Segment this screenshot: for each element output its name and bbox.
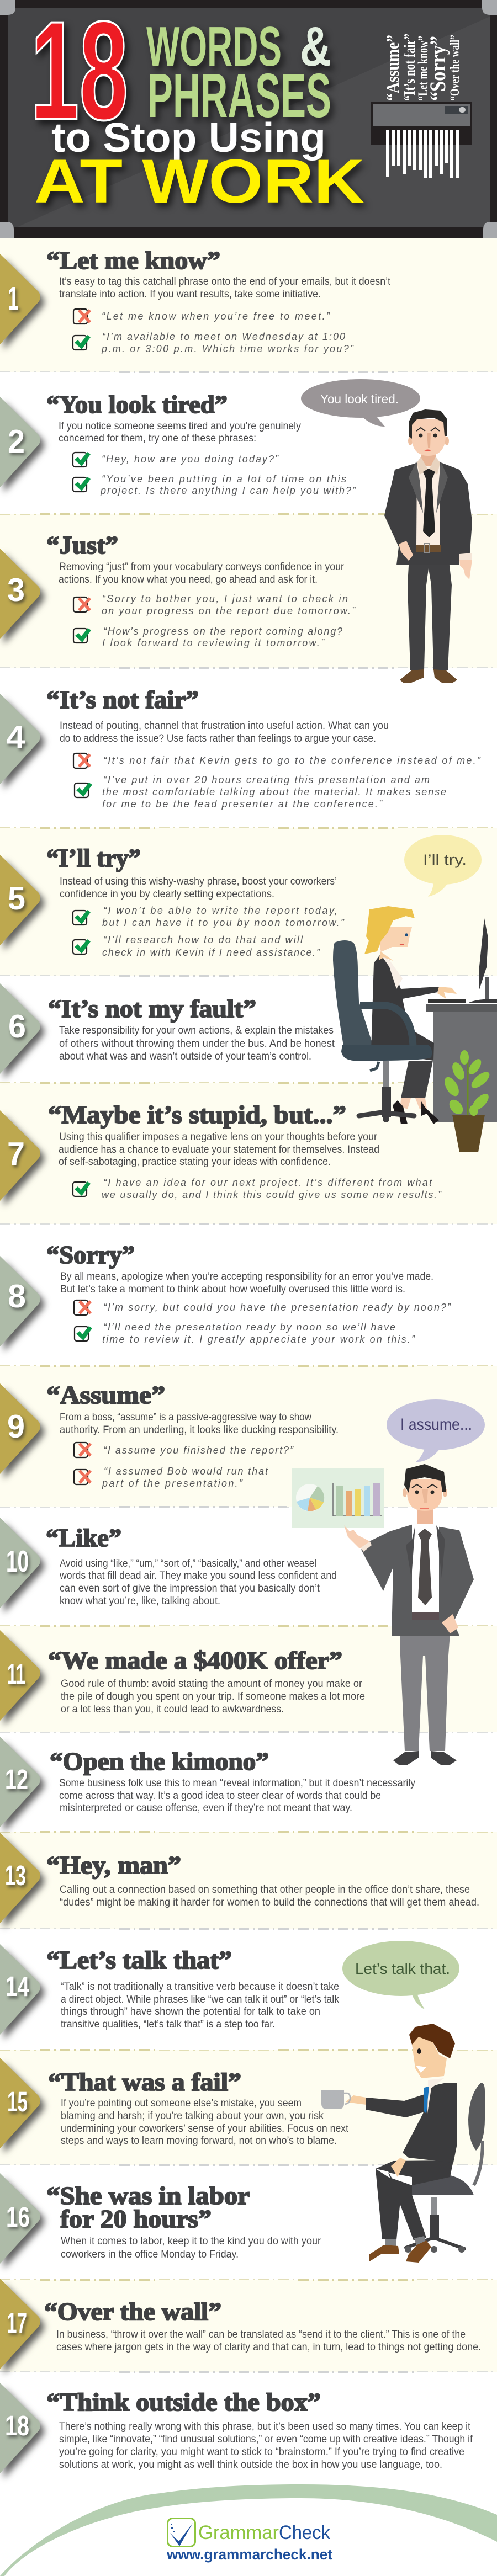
heading 14: “Let’s talk that” xyxy=(46,1946,232,1974)
body 9: From a boss, “assume” is a passive-aggressive way to show xyxy=(60,1411,312,1423)
body 12 xyxy=(59,1777,415,1814)
body 5 xyxy=(60,875,337,900)
badge 6: 6 xyxy=(8,1008,26,1045)
panel: phrase 7 xyxy=(0,1100,442,1201)
body 13: Calling out a connection based on something that other people in the office don’t share, these xyxy=(60,1883,470,1896)
body 18: solutions at work, you might as well think outside the box in how you use language, too. xyxy=(59,2458,442,2471)
body 4: Instead of pouting, channel that frustration into useful action. What can you xyxy=(60,720,389,732)
heading 18: “Think outside the box” xyxy=(46,2388,321,2416)
icon: coffee cup xyxy=(321,2090,350,2109)
panel: phrase 16 xyxy=(0,2173,321,2264)
body 7: audience has a chance to evaluate your statement for themselves. Instead xyxy=(59,1143,379,1156)
good example 4 xyxy=(75,774,446,810)
chart board xyxy=(292,1468,384,1528)
logo wordmark: Check xyxy=(279,2522,330,2543)
body 8: By all means, apologize when you’re accepting responsibility for an error you’ve made. xyxy=(60,1270,433,1282)
body 5: confidence in you by clearly setting expectations. xyxy=(60,888,274,900)
good example 5b: “I’ll research how to do that and will xyxy=(103,934,303,945)
logo wordmark: Grammar xyxy=(198,2522,279,2543)
good example 3: I look forward to reviewing it tomorrow.” xyxy=(102,637,325,648)
good example 4: the most comfortable talking about the material. It makes sense xyxy=(102,786,446,797)
body 3: actions. If you know what you need, go ahead and ask for it. xyxy=(59,573,318,586)
badge 14 xyxy=(0,1944,40,2035)
speech bubble: i assume: I assume... xyxy=(400,1415,472,1434)
speech bubble: you look tired xyxy=(301,379,420,427)
good example 1: p.m. or 3:00 p.m. Which time works for you?” xyxy=(101,343,354,354)
good example 1 xyxy=(73,331,354,354)
icon: shredder: “Let me know” xyxy=(416,36,431,101)
badge 10: 10 xyxy=(6,1544,29,1578)
bad example 1: “Let me know when you’re free to meet.” xyxy=(102,311,330,322)
badge 2: 2 xyxy=(8,423,25,460)
body 14: transitive qualities, “let’s talk that” is a step too far. xyxy=(61,2018,275,2030)
heading 3: “Just” xyxy=(46,531,118,559)
title: words: WORDS xyxy=(146,16,282,78)
body 17: In business, “throw it over the wall” can be translated as “send it to the client.” This is one of the xyxy=(56,2328,466,2340)
body 11 xyxy=(61,1678,365,1715)
badge 15: 15 xyxy=(7,2086,28,2117)
badge 17 xyxy=(0,2279,40,2369)
badge 1 xyxy=(0,254,40,344)
title: phrases: PHRASES xyxy=(147,61,331,130)
heading 4: “It’s not fair” xyxy=(46,685,199,714)
body 11: Good rule of thumb: avoid stating the amount of money you make or xyxy=(61,1678,362,1690)
heading 10: “Like” xyxy=(46,1524,121,1552)
good example 5a: but I can have it to you by noon tomorrow.” xyxy=(102,917,345,928)
body 7 xyxy=(59,1131,379,1168)
badge 7 xyxy=(0,1110,40,1201)
badge 18 xyxy=(0,2383,40,2473)
good example 8: “I’ll need the presentation ready by noon so we’ll have xyxy=(103,1322,395,1333)
heading 15: “That was a fail” xyxy=(48,2068,241,2096)
badge 14: 14 xyxy=(6,1971,29,2002)
body 6 xyxy=(59,1024,335,1062)
badge 9: 9 xyxy=(7,1408,25,1445)
body 14: a direct object. While phrases like “we can talk it out” or “let’s talk xyxy=(61,1993,339,2005)
body 8: But let’s take a moment to think about how woefully overused this little word is. xyxy=(60,1283,405,1295)
badge 4 xyxy=(0,694,40,784)
body 15: undermining your coworkers’ sense of your abilities. Focus on next xyxy=(61,2122,349,2135)
body 6: about what was and wasn’t outside of your team’s control. xyxy=(59,1050,311,1062)
bad example 1 xyxy=(73,309,330,324)
badge 12 xyxy=(0,1737,40,1827)
body 15: If you’re pointing out someone else’s mistake, you seem xyxy=(61,2097,302,2109)
body 15: blaming and harsh; if you’re talking about your own, you risk xyxy=(61,2110,324,2122)
badge 15 xyxy=(0,2058,40,2148)
heading 12: “Open the kimono” xyxy=(50,1747,269,1775)
good example 8 xyxy=(75,1322,415,1345)
bad example 9b xyxy=(74,1466,268,1489)
good example 2a: “Hey, how are you doing today?” xyxy=(102,454,279,465)
badge 11: 11 xyxy=(7,1658,25,1690)
good example 8: time to review it. I greatly appreciate your work on this.” xyxy=(102,1334,415,1345)
heading 16 xyxy=(46,2181,250,2233)
badge 2 xyxy=(0,397,40,487)
badge 4: 4 xyxy=(6,719,25,755)
badge 5: 5 xyxy=(8,880,25,917)
body 16: coworkers in the office Monday to Friday. xyxy=(61,2248,239,2260)
badge 8: 8 xyxy=(8,1278,26,1314)
good example 2b: project. Is there anything I can help you with?” xyxy=(100,485,356,496)
body 11: or a lot less than you, it could lead to awkwardness. xyxy=(61,1703,284,1715)
body 2 xyxy=(59,420,301,444)
body 3 xyxy=(59,561,344,586)
body 18 xyxy=(59,2420,473,2471)
body 1 xyxy=(59,275,391,300)
body 17 xyxy=(56,2328,481,2353)
bad example 4 xyxy=(73,753,481,768)
body 6: of others without throwing them under the bus. And be honest xyxy=(59,1037,335,1050)
body 10 xyxy=(59,1557,337,1607)
panel: phrase 6 xyxy=(0,983,335,1074)
illustration: man with speech bubble xyxy=(301,379,472,683)
icon: logo check xyxy=(168,2519,195,2546)
badge 9 xyxy=(0,1383,40,1474)
body 12: Some business folk use this to mean “reveal information,” but it doesn’t necessarily xyxy=(59,1777,415,1789)
body 6: Take responsibility for your own actions, & explain the mistakes xyxy=(59,1024,334,1036)
body 13: “dudes” might be making it harder for women to build the connections that will get them ahead. xyxy=(60,1896,479,1908)
body 14: things through” have shown the potential for talk to take on xyxy=(61,2005,320,2018)
title: at work: AT WORK xyxy=(34,147,364,216)
heading 6: “It’s not my fault” xyxy=(48,994,256,1023)
good example 2b xyxy=(73,473,356,496)
panel: phrase 9 xyxy=(0,1381,339,1489)
bad example 8 xyxy=(74,1300,451,1315)
good example 2a xyxy=(73,452,279,467)
body 7: of self-sabotaging, practice stating your ideas with confidence. xyxy=(59,1156,331,1168)
badge 12: 12 xyxy=(5,1764,28,1795)
body 2: concerned for them, try one of these phrases: xyxy=(59,432,256,444)
body 15 xyxy=(61,2097,349,2147)
badge 6 xyxy=(0,983,40,1074)
body 10: know what you’re, like, talking about. xyxy=(60,1595,220,1607)
icon: shredder: “Sorry” xyxy=(425,36,450,101)
body 10: Avoid using “like,” “um,” “sort of,” “basically,” and other weasel xyxy=(60,1557,316,1569)
badge 16: 16 xyxy=(6,2201,30,2233)
badge 18: 18 xyxy=(5,2410,29,2441)
body 16 xyxy=(61,2235,321,2260)
icon: plant xyxy=(442,1050,492,1152)
body 13 xyxy=(60,1883,479,1908)
body 8 xyxy=(60,1270,433,1295)
panel: phrase 4 xyxy=(0,685,481,810)
body 7: Using this qualifier imposes a negative lens on your thoughts before your xyxy=(59,1131,377,1143)
body 14 xyxy=(61,1981,339,2030)
speech bubble: i assume xyxy=(387,1399,485,1462)
badge 3 xyxy=(0,549,40,639)
panel: phrase 8 xyxy=(0,1241,451,1346)
body 16: When it comes to labor, keep it to the kind you do with your xyxy=(61,2235,321,2247)
body 5: Instead of using this wishy-washy phrase, boost your coworkers’ xyxy=(60,875,337,887)
panel: phrase 18 xyxy=(0,2383,473,2473)
speech bubble: let's talk that xyxy=(342,1941,459,2009)
panel: phrase 2 xyxy=(0,390,356,496)
body 12: come across that way. It’s a good idea to steer clear of words that could be xyxy=(59,1790,381,1802)
badge 13 xyxy=(0,1833,40,1923)
good example 5b: check in with Kevin if I need assistance.” xyxy=(102,947,320,958)
badge 17: 17 xyxy=(7,2307,27,2339)
panel: phrase 1 xyxy=(0,246,391,354)
badge 10 xyxy=(0,1518,40,1608)
good example 7: “I have an idea for our next project. It’s different from what xyxy=(103,1177,432,1188)
illustration: woman at desk xyxy=(333,835,497,1152)
illustration: man with chart xyxy=(292,1399,485,1765)
logo url: www.grammarcheck.net xyxy=(166,2546,332,2563)
bad example 3: “Sorry to bother you, I just want to check in xyxy=(102,593,348,604)
bad example 3 xyxy=(73,593,356,616)
bad example 9b: part of the presentation.” xyxy=(102,1478,243,1489)
badge 16 xyxy=(0,2173,40,2264)
good example 2b: “You’ve been putting in a lot of time on this xyxy=(102,473,346,485)
speech bubble: i'll try: I’ll try. xyxy=(423,851,467,868)
body 12: misinterpreted or cause offense, even if they’re not meant that way. xyxy=(60,1802,352,1814)
panel: phrase 13 xyxy=(0,1833,479,1923)
bad example 3: on your progress on the report due tomorrow.” xyxy=(102,605,356,616)
heading 16: for 20 hours” xyxy=(60,2205,212,2233)
title: to stop using: to Stop Using xyxy=(51,114,326,161)
body 9 xyxy=(60,1411,339,1436)
speech bubble: you look tired: You look tired. xyxy=(320,392,399,406)
body 10: words that fill dead air. They make you sound less confident and xyxy=(59,1569,337,1582)
body 2: If you notice someone seems tired and you’re genuinely xyxy=(59,420,301,432)
good example 4: “I’ve put in over 20 hours creating this presentation and am xyxy=(103,774,430,785)
heading 16: “She was in labor xyxy=(46,2181,250,2210)
heading 8: “Sorry” xyxy=(46,1241,135,1269)
good example 5b xyxy=(73,934,320,958)
panel: phrase 17 xyxy=(0,2279,481,2369)
body 18: you’re going for clarity, you might want to stick to “brainstorm.” If you’re trying to find creative xyxy=(59,2446,464,2458)
panel: phrase 5 xyxy=(0,844,345,958)
icon: shredder: “Over the wall” xyxy=(448,35,462,101)
bad example 8: “I’m sorry, but could you have the presentation ready by noon?” xyxy=(103,1302,451,1313)
heading 1: “Let me know” xyxy=(46,246,220,274)
badge 3: 3 xyxy=(7,572,25,608)
panel: phrase 3 xyxy=(0,531,356,648)
badge 11 xyxy=(0,1630,40,1721)
heading 5: “I’ll try” xyxy=(46,844,141,872)
good example 1: “I’m available to meet on Wednesday at 1:00 xyxy=(102,331,345,342)
body 10: can even sort of give the impression that you basically don’t xyxy=(60,1582,320,1594)
bad example 9b: “I assumed Bob would run that xyxy=(104,1466,268,1477)
body 3: Removing “just” from your vocabulary conveys confidence in your xyxy=(59,561,344,573)
logo wordmark xyxy=(198,2522,330,2543)
speech bubble: let's talk that: Let’s talk that. xyxy=(355,1960,450,1977)
icon: shredder xyxy=(371,34,472,178)
panel: phrase 15 xyxy=(0,2058,349,2148)
good example 7: we usually do, and I think this could give us some new results.” xyxy=(102,1189,442,1200)
illustration: man with coffee xyxy=(321,1941,485,2263)
heading 2: “You look tired” xyxy=(46,390,228,418)
panel: phrase 11 xyxy=(0,1630,365,1721)
badge 13: 13 xyxy=(5,1860,26,1891)
icon: shredder: “It’s not fair” xyxy=(401,34,419,101)
body 14: “Talk” is not traditionally a transitive verb because it doesn’t take xyxy=(61,1981,339,1993)
heading 17: “Over the wall” xyxy=(44,2297,221,2325)
good example 5a xyxy=(73,905,345,928)
panel: phrase 14 xyxy=(0,1944,339,2035)
badge 1: 1 xyxy=(8,280,19,317)
badge 5 xyxy=(0,855,40,945)
panel: phrase 12 xyxy=(0,1737,415,1827)
badge 7: 7 xyxy=(7,1136,25,1172)
bad example 4: “It’s not fair that Kevin gets to go to the conference instead of me.” xyxy=(103,755,481,766)
logo: grammarcheck xyxy=(166,2519,332,2563)
footer arc xyxy=(0,2484,497,2576)
body 4: do to address the issue? Use facts rather than feelings to argue your case. xyxy=(60,732,376,744)
body 11: the pile of dough you spent on your trip. If someone makes a lot more xyxy=(61,1690,365,1702)
body 15: steps and ways to learn moving forward, not on who’s to blame. xyxy=(61,2135,337,2147)
good example 5a: “I won’t be able to write the report today, xyxy=(103,905,337,916)
heading 7: “Maybe it’s stupid, but...” xyxy=(48,1100,346,1129)
heading 13: “Hey, man” xyxy=(46,1851,181,1879)
title: ampersand: & xyxy=(300,16,331,78)
bad example 9a xyxy=(74,1443,294,1457)
chair xyxy=(405,2083,485,2253)
body 4 xyxy=(60,720,389,744)
heading 11: “We made a $400K offer” xyxy=(48,1646,342,1674)
badge 8 xyxy=(0,1256,40,1346)
body 1: It’s easy to tag this catchall phrase onto the end of your emails, but it doesn’t xyxy=(59,275,391,288)
good example 3: “How’s progress on the report coming along? xyxy=(103,626,342,637)
heading 9: “Assume” xyxy=(46,1381,165,1409)
good example 3 xyxy=(73,626,342,648)
body 9: authority. From an underling, it looks like ducking responsibility. xyxy=(60,1424,339,1436)
panel: phrase 10 xyxy=(0,1518,337,1608)
bad example 9a: “I assume you finished the report?” xyxy=(103,1445,294,1456)
body 1: translate into action. If you want results, take some initiative. xyxy=(59,288,321,300)
icon: shredder: “Assume” xyxy=(383,35,403,101)
good example 4: for me to be the lead presenter at the conference.” xyxy=(102,799,383,810)
good example 7 xyxy=(73,1177,442,1200)
speech bubble: i'll try xyxy=(404,835,482,897)
